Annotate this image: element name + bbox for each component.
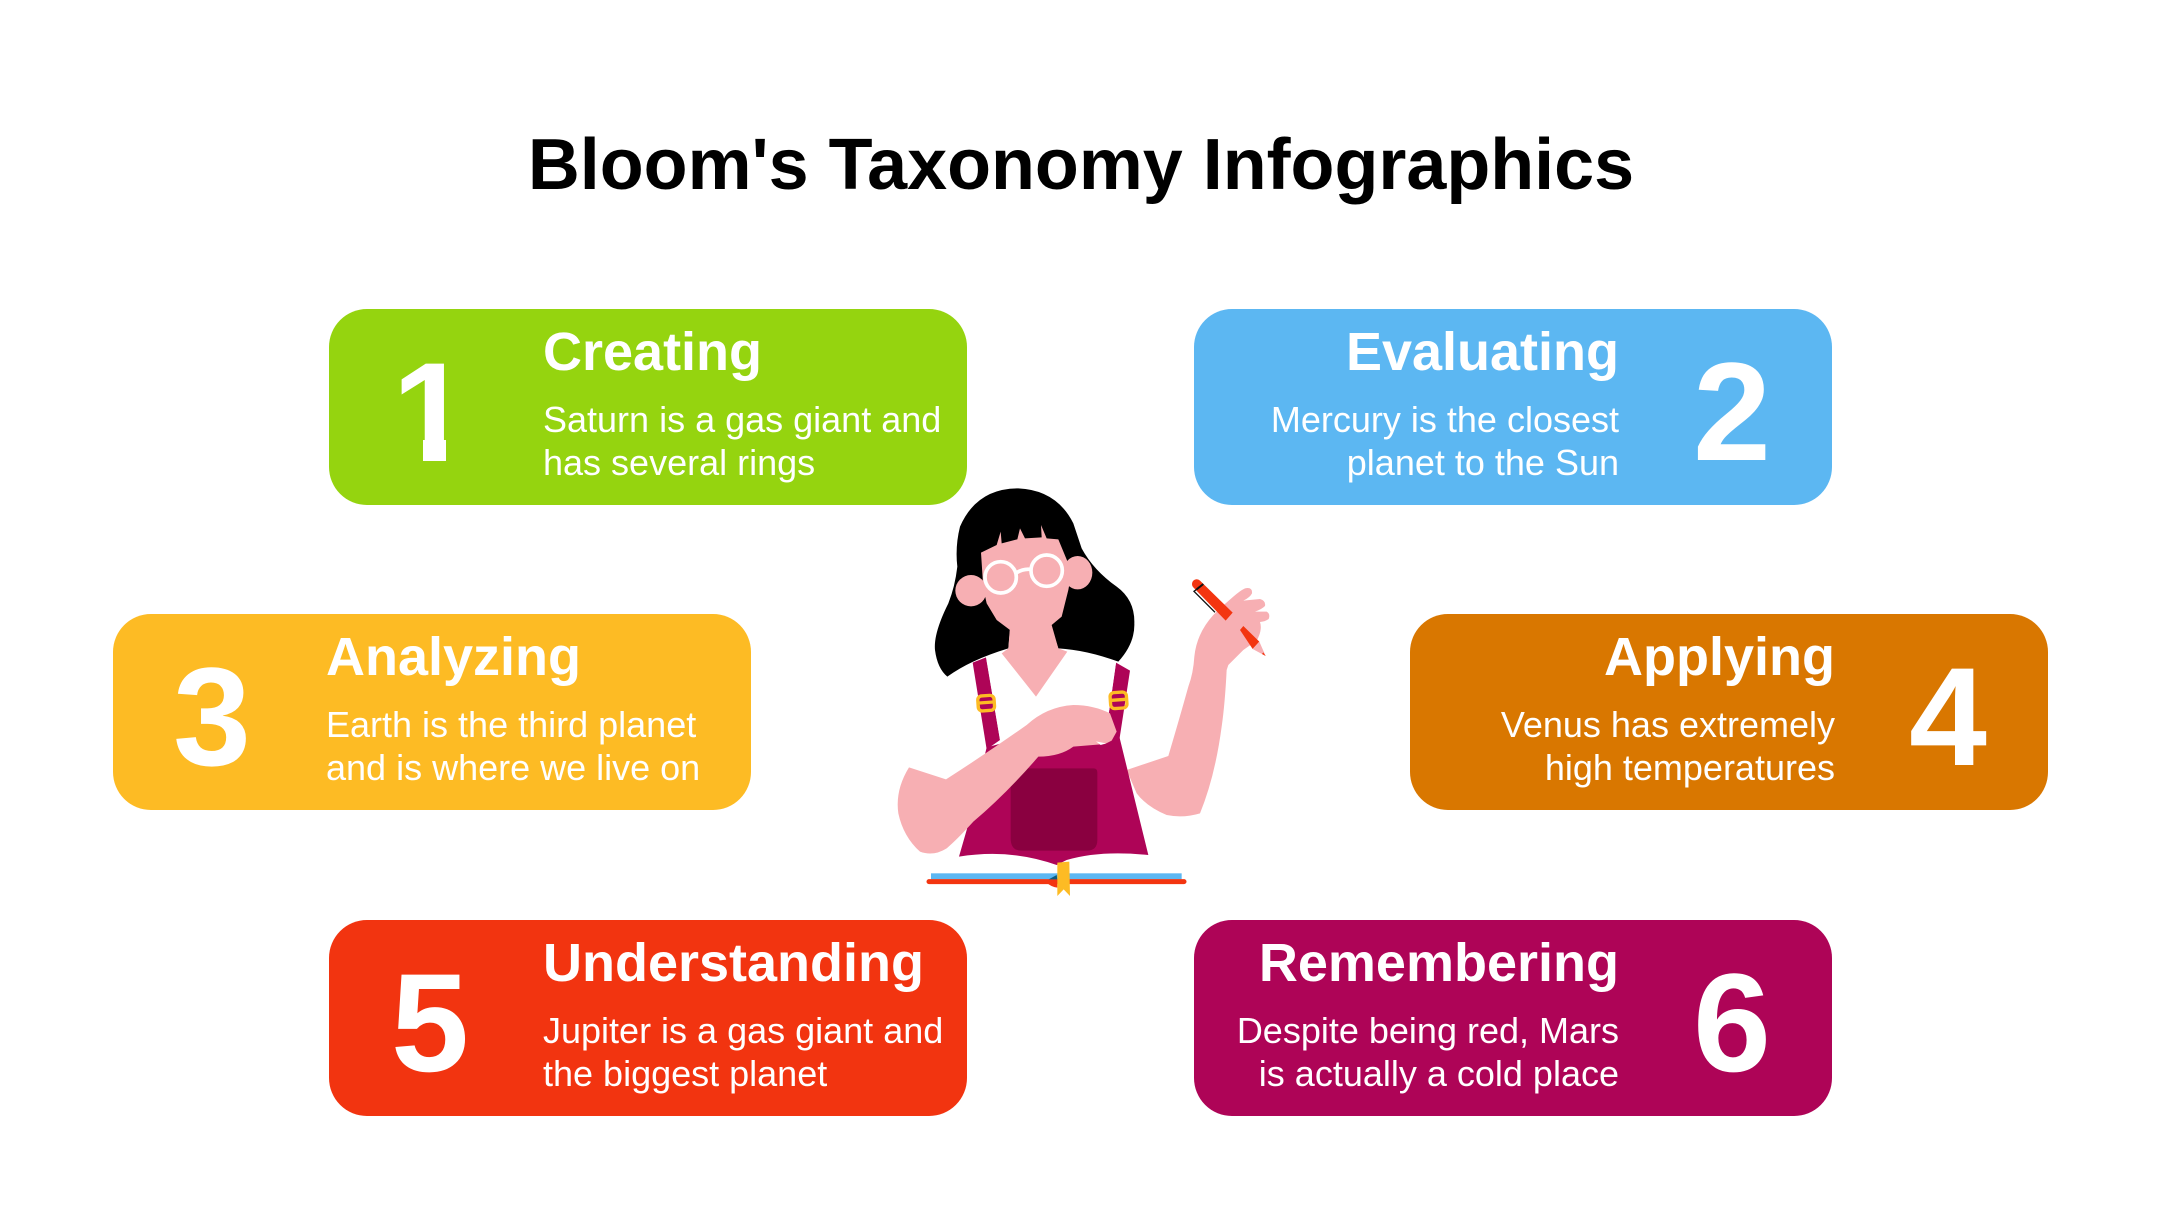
panel: 4 Applying: 4	[1909, 638, 1987, 795]
pocket	[1011, 768, 1097, 851]
shirt	[986, 647, 1117, 740]
panel: 2 Evaluating: Evaluating	[1346, 322, 1619, 382]
panel: 4 Applying: high temperatures	[1545, 747, 1835, 788]
face	[981, 525, 1072, 633]
panel: 3 Analyzing	[113, 614, 751, 810]
panel: 2 Evaluating	[1194, 309, 1832, 505]
folded arm and hand	[898, 705, 1117, 854]
panel: 5 Understanding: 5	[391, 944, 469, 1101]
panel: 1 Creating: Creating	[543, 322, 762, 382]
hair	[935, 488, 1134, 677]
panel: 2 Evaluating: 2	[1693, 333, 1771, 490]
open book	[929, 862, 1184, 896]
panel: 1 Creating	[329, 309, 967, 505]
glasses	[985, 555, 1062, 593]
panel: 1 Creating: 1	[392, 333, 470, 490]
panel: 4 Applying	[1410, 614, 2048, 810]
title: Bloom's Taxonomy Infographics	[528, 125, 1634, 205]
panel: 5 Understanding: the biggest planet	[543, 1053, 827, 1094]
panel: 6 Remembering: Remembering	[1259, 933, 1619, 993]
panel: 2 Evaluating: planet to the Sun	[1347, 442, 1619, 483]
panel: 6 Remembering	[1194, 920, 1832, 1116]
panel: 5 Understanding: Jupiter is a gas giant and	[543, 1010, 943, 1051]
panel: 3 Analyzing: Earth is the third planet	[326, 704, 696, 745]
panel: 6 Remembering: 6	[1693, 944, 1771, 1101]
panel: 4 Applying: Venus has extremely	[1501, 704, 1835, 745]
panel: 3 Analyzing: 3	[173, 638, 251, 795]
panel: 3 Analyzing: and is where we live on	[326, 747, 700, 788]
panel: 4 Applying: Applying	[1604, 627, 1835, 687]
panel: 2 Evaluating: Mercury is the closest	[1271, 399, 1619, 440]
panel: 1 Creating: Saturn is a gas giant and	[543, 399, 941, 440]
ears	[955, 556, 1092, 606]
panel: 5 Understanding: Understanding	[543, 933, 924, 993]
illustration: student with book and pen	[898, 488, 1269, 896]
panel: 6 Remembering: is actually a cold place	[1259, 1053, 1619, 1094]
buckles	[977, 692, 1127, 711]
panel: 3 Analyzing: Analyzing	[326, 627, 581, 687]
raised arm and hand	[1127, 588, 1269, 816]
bookmark	[1057, 862, 1070, 896]
neck	[1002, 625, 1067, 697]
panel: 5 Understanding	[329, 920, 967, 1116]
overalls straps	[973, 657, 1130, 749]
panel: 1 Creating: has several rings	[543, 442, 815, 483]
icon: pen	[1192, 579, 1266, 656]
overalls bib	[959, 715, 1148, 865]
panel: 6 Remembering: Despite being red, Mars	[1237, 1010, 1619, 1051]
